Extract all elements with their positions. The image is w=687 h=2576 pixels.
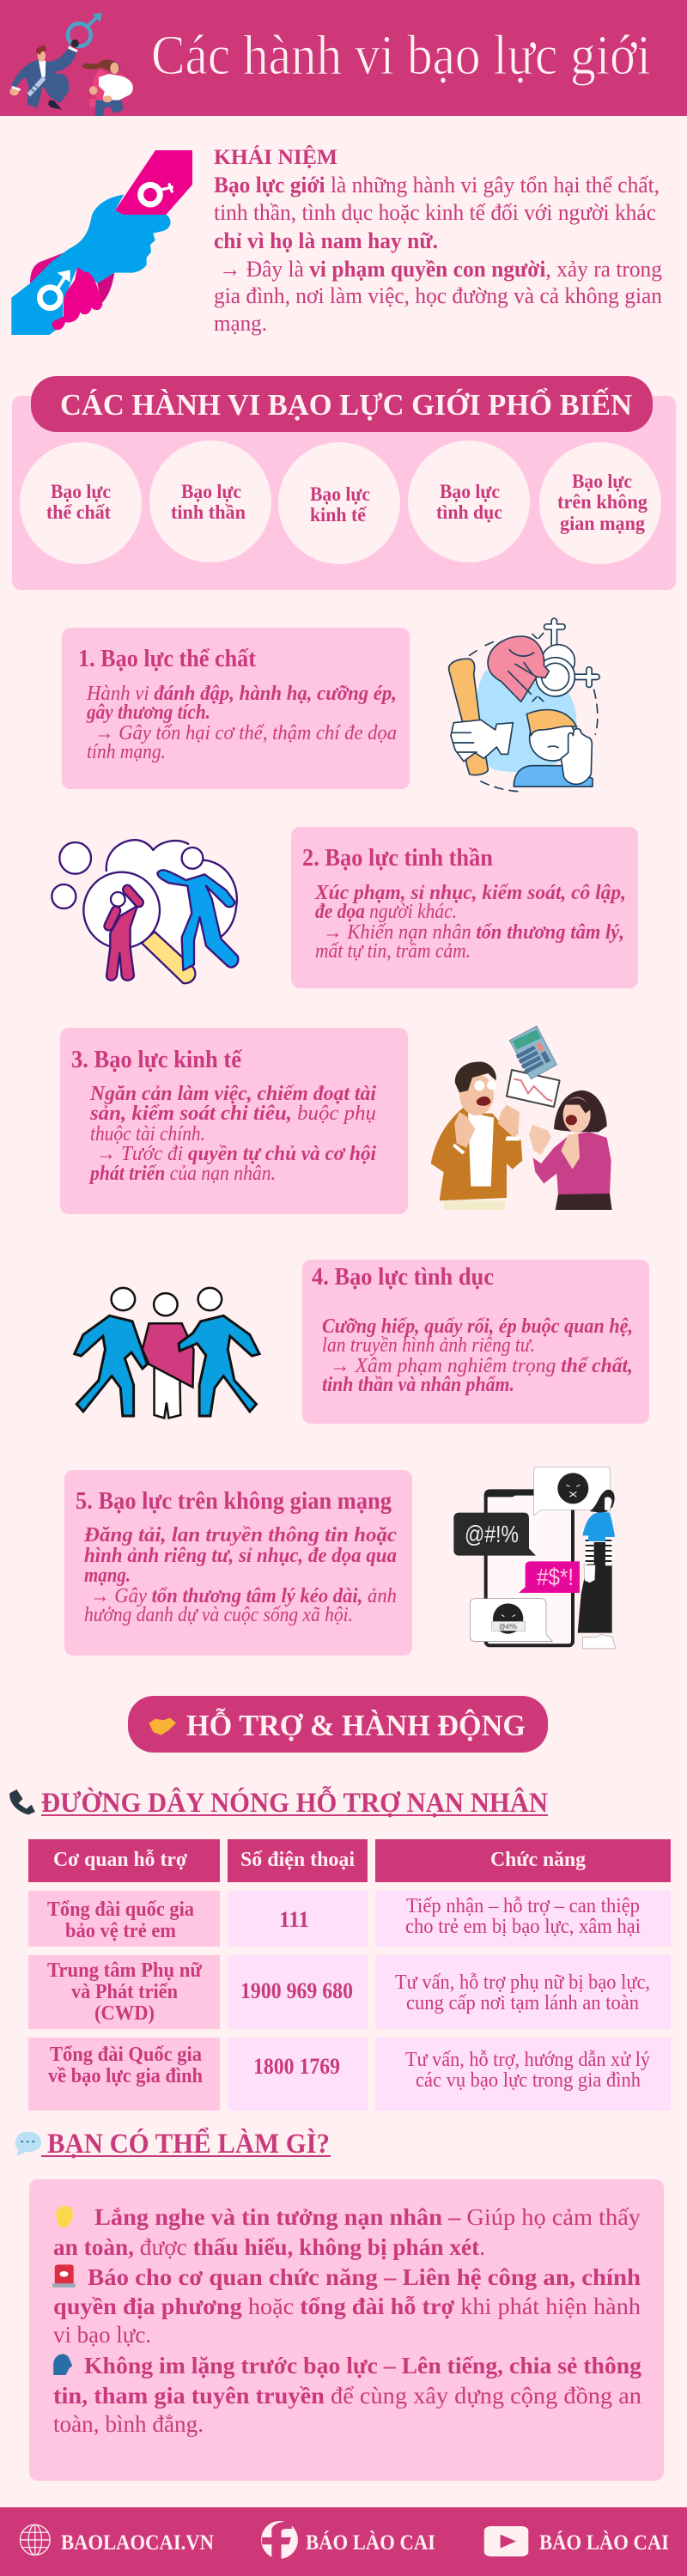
icon: speech bubble xyxy=(15,2132,41,2156)
icon: magnifier and two figures xyxy=(52,840,238,983)
card 5: online violence: hình ảnh riêng tư, sỉ nhục, đe dọa qua xyxy=(84,1545,397,1567)
concept body: → Đây là vi phạm quyền con người, xảy ra trong xyxy=(219,257,662,282)
card 2: mental violence: mất tự tin, trầm cảm. xyxy=(315,940,471,963)
panel background xyxy=(12,396,676,590)
heading: what you can do: BẠN CÓ THỂ LÀM GÌ? xyxy=(47,2127,330,2160)
circle: mental xyxy=(149,440,271,562)
row: CWD: và Phát triển xyxy=(71,1981,178,2003)
circle: sexual: tình dục xyxy=(436,501,502,523)
panel: what you can do: tin, tham gia tuyên truyền để cùng xây dựng cộng đồng an xyxy=(53,2383,642,2409)
card 5: online violence: hưởng danh dự và cuộc sống xã hội. xyxy=(84,1604,353,1626)
concept body: chỉ vì họ là nam hay nữ. xyxy=(214,228,438,253)
row: CWD: cung cấp nơi tạm lánh an toàn xyxy=(406,1992,639,2014)
card 2: mental violence: → Khiến nạn nhân tổn thương tâm lý, xyxy=(323,921,624,944)
concept body: mạng. xyxy=(214,311,267,336)
row: child protection hotline: bảo vệ trẻ em xyxy=(65,1920,176,1942)
icon: worried couple with calculator and chart xyxy=(431,1026,612,1210)
table header: Cơ quan hỗ trợ xyxy=(53,1849,188,1871)
icon: siren xyxy=(52,2264,76,2287)
row: domestic violence hotline: Tư vấn, hỗ trợ, hướng dẫn xử lý xyxy=(405,2049,650,2071)
panel: what you can do: an toàn, được thấu hiểu, không bị phán xét. xyxy=(53,2234,485,2260)
table header: Chức năng xyxy=(490,1849,586,1871)
circle: sexual xyxy=(408,440,530,562)
row: domestic violence hotline: Tổng đài Quốc gia xyxy=(50,2044,202,2066)
row: domestic violence hotline: về bạo lực gia đình xyxy=(48,2065,203,2087)
row: child protection hotline: Tổng đài quốc gia xyxy=(47,1899,194,1921)
icon: phone, abusive message bubbles and woman xyxy=(453,1467,616,1649)
icon: globe xyxy=(20,2524,50,2555)
card 3: economic violence: Ngăn cản làm việc, chiếm đoạt tài xyxy=(89,1083,376,1105)
card 4: sexual violence: Cưỡng hiếp, quấy rối, ép buộc quan hệ, xyxy=(322,1315,633,1338)
row: CWD: 1900 969 680 xyxy=(240,1978,353,2003)
footer band xyxy=(0,2507,687,2576)
heading: victim support hotline: ĐƯỜNG DÂY NÓNG HỖ TRỢ NẠN NHÂN xyxy=(41,1784,548,1819)
card 4: sexual violence: → Xâm phạm nghiêm trọng thể chất, xyxy=(330,1355,633,1377)
card 2: mental violence: 2. Bạo lực tinh thần xyxy=(302,844,493,872)
concept body: Bạo lực giới là những hành vi gây tổn hại thể chất, xyxy=(214,173,660,197)
concept body xyxy=(214,173,662,336)
concept text xyxy=(214,145,662,336)
circle: online: Bạo lực xyxy=(572,471,632,492)
circle: physical xyxy=(20,442,142,564)
icon: man and woman pulling gender symbol xyxy=(9,13,133,116)
card 3: economic violence xyxy=(60,1028,408,1214)
section heading pill xyxy=(31,376,653,432)
card 3: economic violence: → Tước đi quyền tự chủ và cơ hội xyxy=(96,1143,376,1165)
footer band: BÁO LÀO CAI xyxy=(306,2530,435,2555)
row: CWD xyxy=(28,1955,671,2029)
icon: phone, abusive message bubbles and woman: @#!% xyxy=(465,1521,519,1547)
card 4: sexual violence: 4. Bạo lực tình dục xyxy=(312,1263,494,1291)
section heading: support and action xyxy=(128,1696,548,1753)
row: CWD: Trung tâm Phụ nữ xyxy=(47,1959,203,1982)
icon: speaking head xyxy=(53,2354,72,2375)
card 2: mental violence: Xúc phạm, sỉ nhục, kiểm soát, cô lập, xyxy=(314,882,626,904)
icon: fist, bat and man blocking xyxy=(449,621,598,792)
footer band: BÁO LÀO CAI xyxy=(539,2530,669,2555)
section heading pill: CÁC HÀNH VI BẠO LỰC GIỚI PHỔ BIẾN xyxy=(60,386,632,422)
card 1: physical violence: tính mạng. xyxy=(87,741,166,763)
panel: what you can do: Không im lặng trước bạo lực – Lên tiếng, chia sẻ thông xyxy=(84,2353,641,2379)
row: domestic violence hotline: các vụ bạo lực trong gia đình xyxy=(416,2069,641,2092)
footer band: BAOLAOCAI.VN xyxy=(61,2531,214,2555)
circle: physical: thể chất xyxy=(46,501,111,523)
card 1: physical violence: Hành vi đánh đập, hành hạ, cưỡng ép, xyxy=(86,683,397,705)
circle: economic: kinh tế xyxy=(310,504,368,526)
section heading: support and action: HỖ TRỢ & HÀNH ĐỘNG xyxy=(186,1707,526,1742)
header band xyxy=(0,0,687,116)
hotline table xyxy=(28,1839,671,2111)
row: domestic violence hotline xyxy=(28,2038,671,2111)
card 5: online violence: → Gây tổn thương tâm lý kéo dài, ảnh xyxy=(90,1585,397,1607)
card 4: sexual violence xyxy=(302,1260,649,1424)
panel: common forms of gender violence xyxy=(12,376,676,590)
card 3: economic violence: thuộc tài chính. xyxy=(90,1123,205,1145)
circle: sexual: Bạo lực xyxy=(440,481,500,502)
icon: phone, abusive message bubbles and woman: #$*! xyxy=(537,1564,574,1590)
circle: physical: Bạo lực xyxy=(51,481,111,502)
icon: youtube xyxy=(484,2526,528,2556)
circle: mental: tinh thần xyxy=(171,501,246,523)
circle: economic: Bạo lực xyxy=(310,483,370,505)
panel: what you can do xyxy=(29,2179,664,2481)
row: CWD: Tư vấn, hỗ trợ phụ nữ bị bạo lực, xyxy=(395,1971,650,1994)
card 1: physical violence xyxy=(62,628,410,789)
concept body: tinh thần, tình dục hoặc kinh tế đối với người khác xyxy=(214,200,656,225)
circle: economic xyxy=(278,442,400,564)
concept heading: KHÁI NIỆM xyxy=(214,145,337,169)
card 3: economic violence: 3. Bạo lực kinh tế xyxy=(71,1046,243,1073)
panel: what you can do: quyền địa phương hoặc tổng đài hỗ trợ khi phát hiện hành xyxy=(53,2293,641,2319)
card 2: mental violence: đe dọa người khác. xyxy=(315,901,457,923)
card 3: economic violence: phát triển của nạn nhân. xyxy=(88,1163,276,1185)
row: child protection hotline: 111 xyxy=(279,1907,309,1932)
card 1: physical violence: 1. Bạo lực thể chất xyxy=(78,645,256,672)
card 2: mental violence xyxy=(291,827,638,988)
panel: what you can do: vi bạo lực. xyxy=(53,2322,151,2348)
panel: what you can do: Lắng nghe và tin tưởng nạn nhân – Giúp họ cảm thấy xyxy=(94,2204,641,2230)
row: domestic violence hotline: 1800 1769 xyxy=(253,2054,340,2079)
row: CWD: (CWD) xyxy=(94,2002,155,2025)
circle: online: trên không xyxy=(557,491,647,513)
icon: hands holding gender symbols xyxy=(11,150,192,335)
icon: handshake xyxy=(149,1718,176,1735)
icon: phone, abusive message bubbles and woman: @#!% xyxy=(499,1623,517,1631)
concept body: gia đình, nơi làm việc, học đường và cả không gian xyxy=(214,283,662,308)
card 5: online violence: mạng. xyxy=(84,1564,131,1587)
card 5: online violence: 5. Bạo lực trên không gian mạng xyxy=(76,1487,392,1515)
card 1: physical violence: → Gây tổn hại cơ thể, thậm chí đe dọa xyxy=(94,722,397,744)
icon: woman between two men xyxy=(75,1288,259,1418)
table header: Số điện thoại xyxy=(240,1849,355,1871)
card 3: economic violence: sản, kiểm soát chi tiêu, buộc phụ xyxy=(89,1103,376,1125)
circle: online xyxy=(539,442,661,564)
circle: online: gian mạng xyxy=(560,513,645,534)
icon: phone xyxy=(9,1789,35,1814)
row: child protection hotline: Tiếp nhận – hỗ trợ – can thiệp xyxy=(406,1895,640,1917)
icon: ear xyxy=(56,2206,73,2228)
card 5: online violence: Đăng tải, lan truyền thông tin hoặc xyxy=(83,1524,397,1546)
row: child protection hotline: cho trẻ em bị bạo lực, xâm hại xyxy=(405,1916,641,1938)
row: child protection hotline xyxy=(28,1891,671,1947)
icon: facebook xyxy=(261,2521,298,2559)
circle: mental: Bạo lực xyxy=(181,481,241,502)
card 5: online violence xyxy=(64,1470,412,1656)
table header xyxy=(28,1839,671,1882)
card 4: sexual violence: tinh thần và nhân phẩm. xyxy=(322,1374,514,1396)
panel: what you can do: toàn, bình đẳng. xyxy=(53,2411,204,2437)
panel: what you can do: Báo cho cơ quan chức năng – Liên hệ công an, chính xyxy=(88,2264,641,2290)
card 1: physical violence: gây thương tích. xyxy=(86,702,210,724)
card 4: sexual violence: lan truyền hình ảnh riêng tư. xyxy=(322,1334,535,1357)
